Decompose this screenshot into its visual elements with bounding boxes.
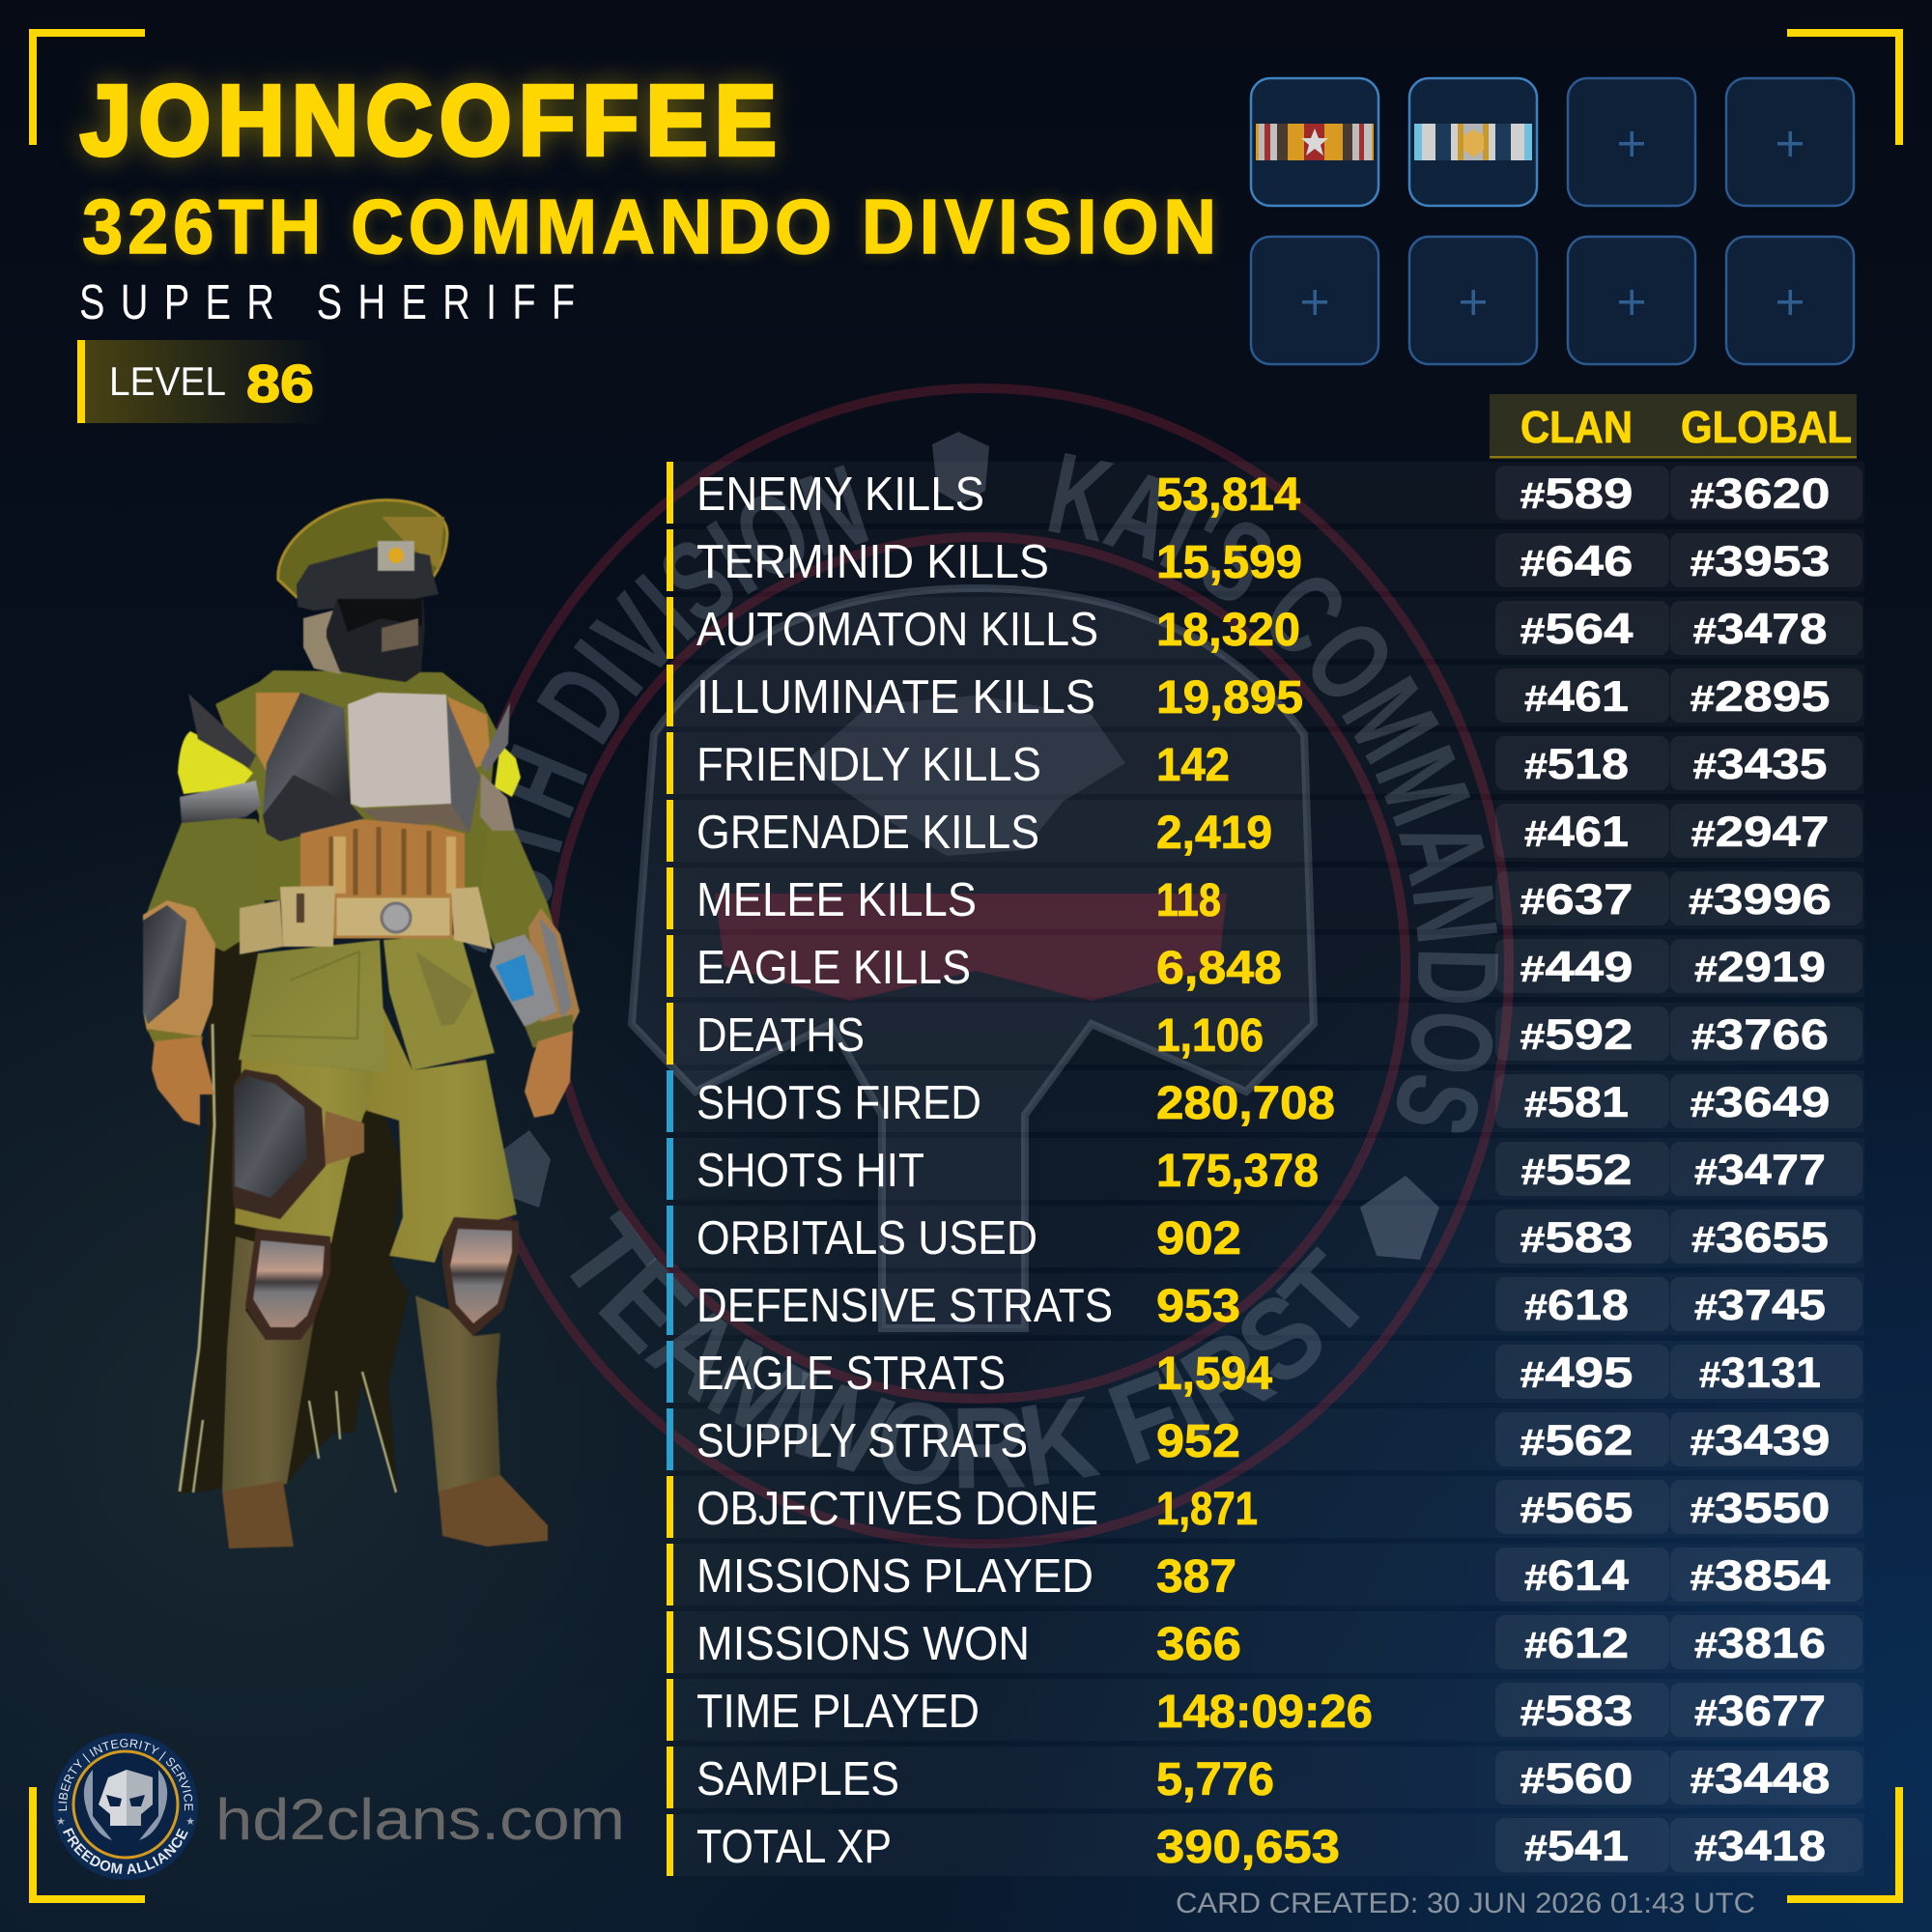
row: deaths: #592 — [1520, 1011, 1633, 1059]
row: defensive strats: #618 — [1524, 1282, 1629, 1329]
right gauntlet and device — [490, 908, 580, 1048]
row: melee kills: 118 — [1156, 875, 1221, 926]
row: orbitals used: ORBITALS USED — [696, 1212, 1037, 1264]
chest pad right — [447, 696, 491, 773]
row: objectives done: #3550 — [1690, 1485, 1830, 1532]
logo: freedom alliance emblem: ★ — [56, 1816, 66, 1828]
right sleeve — [467, 793, 578, 1026]
row: deaths: #3766 — [1691, 1011, 1829, 1059]
row: terminid kills: 15,599 — [1156, 537, 1302, 588]
row: eagle kills: EAGLE KILLS — [696, 942, 971, 994]
row: grenade kills: #461 — [1524, 809, 1629, 856]
row: missions played: #3854 — [1690, 1552, 1831, 1600]
padded abdomen — [300, 819, 465, 898]
level badge — [77, 340, 328, 423]
row: grenade kills — [667, 800, 1864, 862]
row: melee kills: #637 — [1520, 876, 1633, 923]
row: total xp: TOTAL XP — [696, 1821, 892, 1873]
logo: freedom alliance emblem: ★ — [185, 1816, 195, 1828]
row: illuminate kills — [667, 665, 1864, 726]
row: grenade kills: #2947 — [1690, 809, 1830, 856]
row: deaths: DEATHS — [696, 1009, 865, 1062]
row: orbitals used: 902 — [1156, 1213, 1241, 1264]
row: automaton kills: #564 — [1520, 606, 1634, 653]
row: melee kills — [667, 867, 1864, 929]
row: objectives done: 1,871 — [1156, 1484, 1258, 1535]
cape — [178, 927, 409, 1495]
row: samples: #560 — [1520, 1755, 1633, 1803]
row: enemy kills: #589 — [1520, 470, 1633, 518]
row: illuminate kills: #2895 — [1690, 673, 1830, 721]
row: eagle strats: 1,594 — [1156, 1349, 1272, 1400]
row: enemy kills — [667, 462, 1864, 524]
row: missions played — [667, 1544, 1864, 1605]
row: enemy kills: ENEMY KILLS — [696, 469, 984, 521]
row: enemy kills: #3620 — [1690, 470, 1830, 518]
stats table header: CLAN — [1520, 402, 1633, 452]
helmet mask — [303, 599, 425, 682]
row: missions played: 387 — [1156, 1551, 1236, 1603]
row: missions won: #3816 — [1694, 1620, 1826, 1667]
row: shots fired — [667, 1070, 1864, 1132]
row: total xp: #541 — [1524, 1823, 1629, 1870]
row: eagle strats: #495 — [1520, 1350, 1633, 1397]
row: illuminate kills: 19,895 — [1156, 672, 1303, 724]
row: friendly kills: FRIENDLY KILLS — [696, 739, 1041, 791]
row: samples: #3448 — [1690, 1755, 1830, 1803]
row: shots hit: 175,378 — [1156, 1146, 1319, 1197]
level badge: 86 — [246, 354, 314, 413]
thigh armor — [232, 1069, 364, 1219]
row: illuminate kills: ILLUMINATE KILLS — [696, 671, 1095, 724]
row: grenade kills: 2,419 — [1156, 808, 1272, 859]
row: defensive strats: 953 — [1156, 1281, 1240, 1332]
row: friendly kills — [667, 732, 1864, 794]
row: friendly kills: #518 — [1524, 741, 1629, 788]
player rank title: SUPER SHERIFF — [79, 274, 575, 329]
heading: division name: 326TH COMMANDO DIVISION — [82, 183, 1216, 270]
row: friendly kills: 142 — [1156, 740, 1230, 791]
row: supply strats: SUPPLY STRATS — [696, 1415, 1028, 1467]
card creation date: CARD CREATED: 30 JUN 2026 01:43 UTC — [1176, 1888, 1755, 1919]
row: grenade kills: GRENADE KILLS — [696, 807, 1039, 859]
left glove — [152, 1037, 214, 1125]
knee pads — [245, 1217, 519, 1340]
row: eagle kills: #2919 — [1694, 944, 1826, 991]
row: shots fired: #3649 — [1690, 1079, 1830, 1126]
row: supply strats: 952 — [1156, 1416, 1240, 1467]
row: automaton kills — [667, 597, 1864, 659]
row: missions won: MISSIONS WON — [696, 1618, 1030, 1670]
row: missions won: #612 — [1524, 1620, 1629, 1667]
officer hat — [278, 500, 447, 611]
row: automaton kills: #3478 — [1692, 606, 1828, 653]
left sleeve — [145, 815, 275, 952]
row: orbitals used — [667, 1206, 1864, 1267]
right glove — [525, 1031, 573, 1118]
medal slots — [1251, 78, 1854, 364]
row: total xp: 390,653 — [1156, 1822, 1340, 1873]
row: terminid kills: #3953 — [1690, 538, 1830, 585]
trousers — [235, 1005, 517, 1263]
left gauntlet — [143, 900, 215, 1048]
row: eagle kills: #449 — [1520, 944, 1633, 991]
row: deaths — [667, 1003, 1864, 1065]
boots — [222, 1475, 548, 1548]
row: supply strats — [667, 1408, 1864, 1470]
row: defensive strats: DEFENSIVE STRATS — [696, 1280, 1113, 1332]
watermark: clan emblem: KAI'S COMMANDOS — [1048, 453, 1498, 1132]
row: eagle strats: EAGLE STRATS — [696, 1348, 1006, 1400]
stats table header — [1490, 394, 1857, 458]
row: objectives done — [667, 1476, 1864, 1538]
title: player name: JOHNCOFFEE — [80, 66, 777, 177]
stats table header: GLOBAL — [1681, 402, 1852, 452]
row: missions won: 366 — [1156, 1619, 1241, 1670]
site name: hd2clans.com — [215, 1787, 625, 1852]
logo: freedom alliance emblem: FREEDOM ALLIANCE — [63, 1828, 188, 1874]
row: time played: #3677 — [1694, 1688, 1826, 1735]
row: eagle kills — [667, 935, 1864, 997]
empty medal slots — [1251, 78, 1854, 364]
row: eagle strats — [667, 1341, 1864, 1403]
row: objectives done: #565 — [1520, 1485, 1633, 1532]
row: shots hit: #552 — [1520, 1147, 1633, 1194]
row: shots hit: #3477 — [1694, 1147, 1826, 1194]
row: time played: 148:09:26 — [1156, 1687, 1373, 1738]
lower legs — [222, 1236, 500, 1495]
row: missions won — [667, 1611, 1864, 1673]
row: time played — [667, 1679, 1864, 1741]
row: total xp — [667, 1814, 1864, 1876]
watermark: clan emblem — [452, 384, 1514, 1548]
row: missions played: MISSIONS PLAYED — [696, 1550, 1094, 1603]
belt and pouches — [240, 886, 493, 954]
character: armored soldier — [143, 500, 580, 1548]
row: missions played: #614 — [1524, 1552, 1629, 1600]
level badge: LEVEL — [109, 358, 226, 404]
row: automaton kills: 18,320 — [1156, 605, 1300, 656]
row: supply strats: #562 — [1520, 1417, 1633, 1464]
row: shots hit: SHOTS HIT — [696, 1145, 924, 1197]
row: shots fired: 280,708 — [1156, 1078, 1335, 1129]
logo: freedom alliance emblem — [53, 1733, 198, 1880]
row: melee kills: MELEE KILLS — [696, 874, 977, 926]
row: orbitals used: #583 — [1520, 1214, 1633, 1262]
row: objectives done: OBJECTIVES DONE — [696, 1483, 1098, 1535]
row: total xp: #3418 — [1694, 1823, 1826, 1870]
row: terminid kills — [667, 529, 1864, 591]
row: defensive strats — [667, 1273, 1864, 1335]
watermark: clan emblem: TEAMWORK FIRST — [570, 1209, 1360, 1488]
upper torso jacket — [215, 670, 497, 900]
row: orbitals used: #3655 — [1691, 1214, 1829, 1262]
medal slot 1: ribbon with star — [1251, 78, 1378, 206]
row: shots fired: SHOTS FIRED — [696, 1077, 981, 1129]
row: eagle strats: #3131 — [1699, 1350, 1821, 1397]
row: shots fired: #581 — [1524, 1079, 1629, 1126]
row: friendly kills: #3435 — [1692, 741, 1828, 788]
row: shots hit — [667, 1138, 1864, 1200]
row: time played: TIME PLAYED — [696, 1686, 980, 1738]
row: samples: SAMPLES — [696, 1753, 899, 1805]
left shoulder pad — [178, 693, 300, 823]
row: supply strats: #3439 — [1690, 1417, 1830, 1464]
right shoulder pad — [480, 702, 521, 831]
row: samples: 5,776 — [1156, 1754, 1274, 1805]
chest plates — [263, 693, 480, 841]
row: terminid kills: TERMINID KILLS — [696, 536, 1049, 588]
row: melee kills: #3996 — [1689, 876, 1832, 923]
row: illuminate kills: #461 — [1524, 673, 1629, 721]
row: deaths: 1,106 — [1156, 1010, 1264, 1062]
row: samples — [667, 1747, 1864, 1808]
row: enemy kills: 53,814 — [1156, 469, 1300, 521]
medal slot 2: ribbon with gold badge — [1409, 78, 1537, 206]
plus icons — [1302, 131, 1803, 315]
row: defensive strats: #3745 — [1694, 1282, 1826, 1329]
row: time played: #583 — [1520, 1688, 1633, 1735]
row: automaton kills: AUTOMATON KILLS — [696, 604, 1098, 656]
row: terminid kills: #646 — [1520, 538, 1633, 585]
jacket skirt — [239, 934, 495, 1072]
logo: freedom alliance emblem: LIBERTY | INTEGRITY | SERVICE — [58, 1739, 193, 1810]
row: eagle kills: 6,848 — [1156, 943, 1282, 994]
